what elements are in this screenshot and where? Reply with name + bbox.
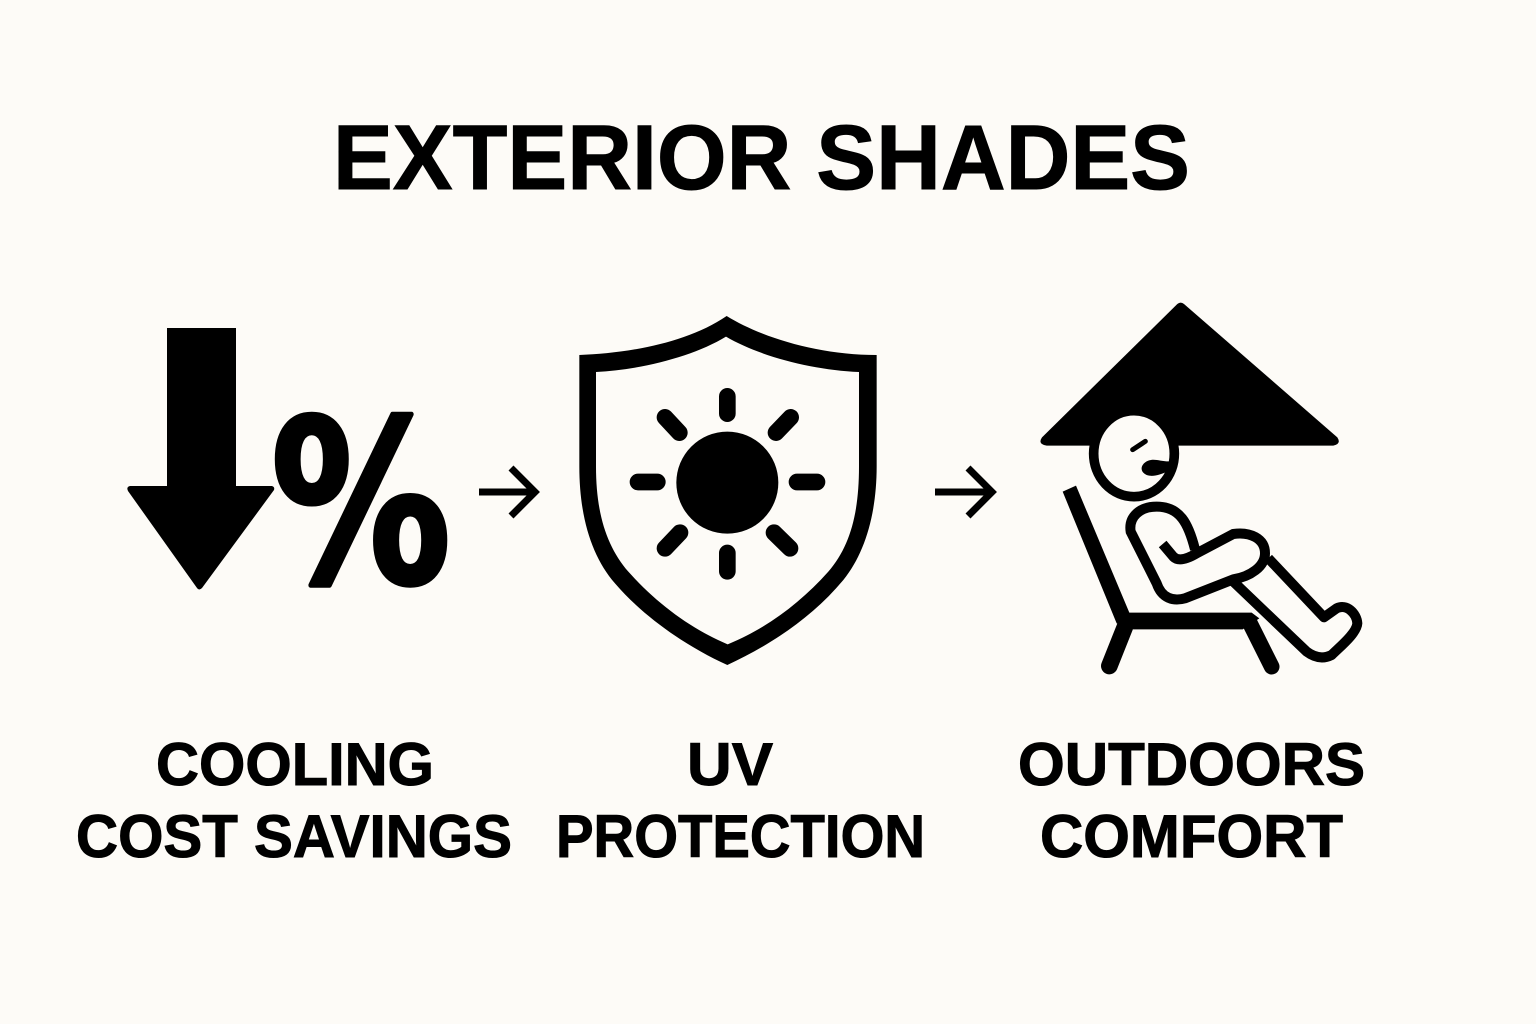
label: UV protection [556,731,925,870]
percent sign: % [271,373,451,636]
label: UV protection: PROTECTION [556,803,925,870]
label: UV protection: UV [687,731,773,798]
icon: shield with sun [579,316,877,665]
lounge chair [1063,486,1272,667]
icon: cooling cost reduction [127,328,451,636]
label: outdoors comfort: COMFORT [1040,803,1343,870]
icon: down arrow [127,328,274,590]
title: EXTERIOR SHADES [333,107,1190,209]
arrow: protection to comfort [935,468,992,516]
icon: person reclining under umbrella [1040,303,1357,667]
label: cooling cost savings [76,731,512,870]
arrow: savings to protection [479,468,535,516]
umbrella canopy [1040,303,1339,446]
label: outdoors comfort [1018,731,1365,870]
sun [638,396,817,571]
label: cooling cost savings: COOLING [156,731,434,798]
label: outdoors comfort: OUTDOORS [1018,731,1365,798]
shield outline [579,316,877,665]
leg [1233,558,1357,657]
head [1094,411,1174,497]
torso and arm [1130,507,1265,600]
label: cooling cost savings: COST SAVINGS [76,803,512,870]
